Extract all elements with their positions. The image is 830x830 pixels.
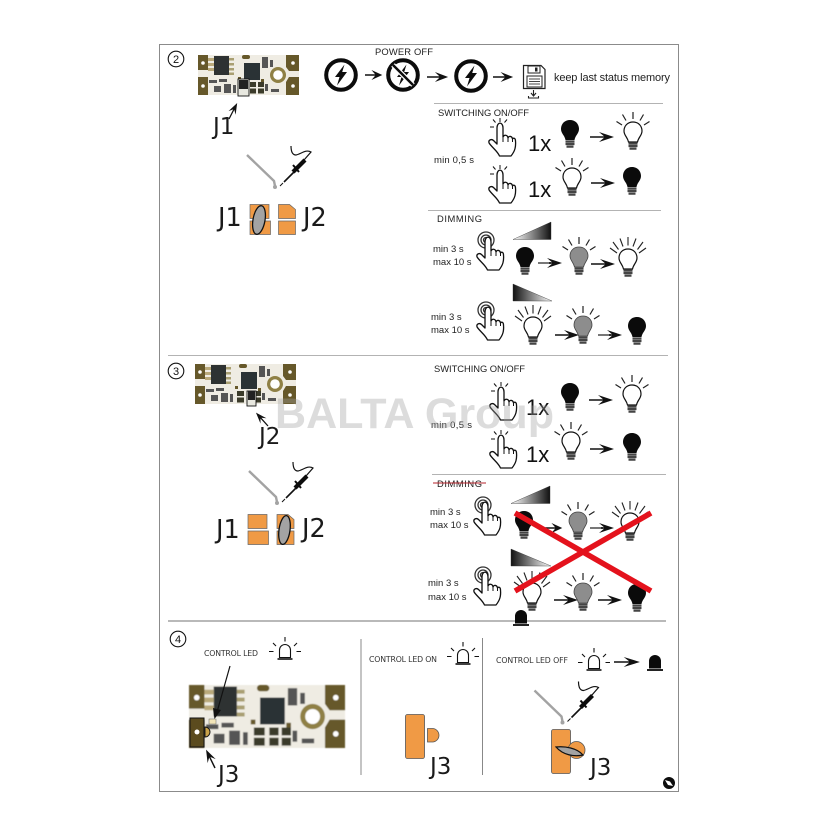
label J3: J3 <box>216 762 239 788</box>
dim up row: max 10 s <box>430 520 469 531</box>
row: tap turns lamp on: 1x <box>526 395 549 420</box>
panel: control LED on <box>369 642 479 780</box>
arrow <box>427 72 448 82</box>
label J1 pads: J1 <box>214 515 240 545</box>
hold time: min 0,5 s <box>434 155 474 166</box>
pad J3 open <box>406 714 439 758</box>
memory note: keep last status memory <box>554 72 670 84</box>
panel: power off memory sequence <box>326 46 670 98</box>
panel: step 2 dimming <box>431 213 646 344</box>
row: tap turns lamp off: 1x <box>528 177 551 202</box>
heading: DIMMING <box>437 213 482 224</box>
label J1: J1 <box>211 114 234 140</box>
panel: step 4 control LED location <box>170 631 345 788</box>
pads J2 bridged with solder <box>277 514 294 545</box>
pads J1 bridged with solder <box>250 204 270 235</box>
icon: beacon on <box>578 648 610 670</box>
step number 4: 4 <box>175 634 181 646</box>
step number 2 <box>168 51 184 67</box>
icon: power on <box>326 60 356 90</box>
panel: step 3 switching on/off <box>431 363 648 468</box>
watermark: BALTA Group <box>275 390 554 438</box>
label J2 pads: J2 <box>301 203 327 233</box>
dim up row: max 10 s <box>433 257 472 268</box>
step number 3: 3 <box>173 366 179 378</box>
panel: control LED off <box>496 648 663 781</box>
arrow <box>493 72 513 82</box>
dim down row: max 10 s <box>431 325 470 336</box>
panel: step 2 switching on/off <box>434 107 650 203</box>
row: tap turns lamp on <box>489 112 650 156</box>
dim up row <box>430 486 648 540</box>
arrow to J1 <box>225 101 241 121</box>
panel: step 3 dimming disabled <box>428 478 651 625</box>
panel: step 2, J1 jumper <box>168 51 327 235</box>
label J1 pads: J1 <box>216 203 242 233</box>
page frame <box>160 44 678 792</box>
dim down row: max 10 s <box>428 592 467 603</box>
dim down row <box>428 549 646 611</box>
dim down row: min 3 s <box>431 312 462 323</box>
circuit board <box>189 685 345 748</box>
control LED label: CONTROL LED <box>204 649 258 658</box>
row: tap turns lamp on <box>490 375 648 420</box>
icon: floppy disk <box>524 66 545 98</box>
arrow <box>365 70 382 80</box>
icon: beacon off <box>513 610 529 625</box>
dim down row: min 3 s <box>428 578 459 589</box>
icon: soldering iron <box>247 146 311 189</box>
heading: SWITCHING ON/OFF <box>438 107 529 118</box>
icon: power on <box>456 61 486 91</box>
pads J2 open <box>278 204 296 234</box>
dim down row <box>431 284 646 344</box>
red cross <box>515 513 651 591</box>
pads J1 open <box>248 514 268 544</box>
dim up row: min 3 s <box>430 507 461 518</box>
row: tap turns lamp off: 1x <box>526 442 549 467</box>
circuit board with J1 marked <box>198 55 299 96</box>
panel: step 3, J2 jumper <box>168 363 326 545</box>
arrow to control LED <box>213 666 230 719</box>
arrow to J2 <box>253 410 271 429</box>
icon: beacon on <box>269 637 301 659</box>
row: tap turns lamp off <box>490 422 641 468</box>
step number 2: 2 <box>173 54 179 66</box>
icon: power off <box>388 60 418 90</box>
dim up row <box>433 222 646 276</box>
icon: beacon on <box>447 642 479 664</box>
icon: manufacturer logo <box>663 777 675 789</box>
pad J3 bridged with solder <box>552 730 585 774</box>
icon: beacon off <box>647 655 663 670</box>
heading power off: POWER OFF <box>375 46 433 57</box>
icon: soldering iron <box>249 462 313 505</box>
heading struck through: DIMMING <box>437 478 482 489</box>
arrow to J3 <box>202 748 219 770</box>
icon: soldering iron <box>534 682 598 724</box>
circuit board with J2 marked <box>195 364 296 406</box>
label: CONTROL LED OFF <box>496 656 568 665</box>
dim up row: min 3 s <box>433 244 464 255</box>
step number 3 <box>168 363 184 379</box>
step number 4 <box>170 631 186 647</box>
label: CONTROL LED ON <box>369 655 437 664</box>
label J3: J3 <box>428 754 451 780</box>
row: tap turns lamp on: 1x <box>528 131 551 156</box>
arrow <box>614 657 640 667</box>
label J3: J3 <box>588 755 611 781</box>
heading: SWITCHING ON/OFF <box>434 363 525 374</box>
label J2: J2 <box>257 424 280 450</box>
row: tap turns lamp off <box>489 158 641 203</box>
label J2 pads: J2 <box>300 514 326 544</box>
hold time: min 0,5 s <box>431 420 472 431</box>
